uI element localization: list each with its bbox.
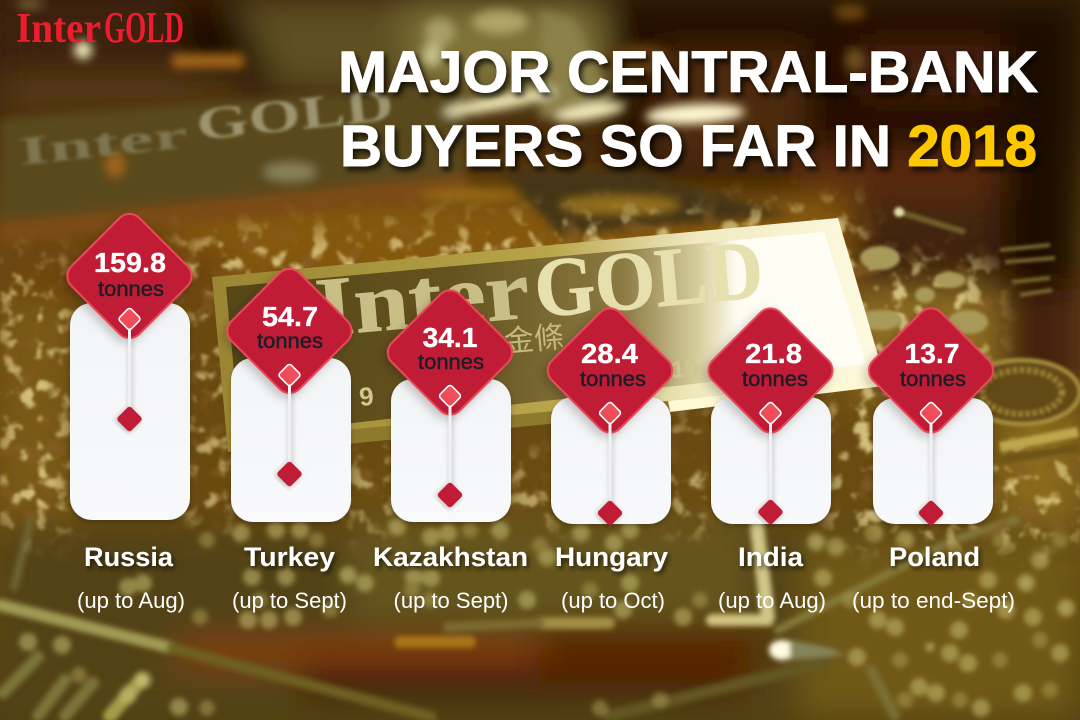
country: Russia — [84, 542, 174, 572]
country: Hungary — [555, 542, 668, 572]
panel: India — [703, 303, 838, 613]
country: Kazakhstan — [373, 542, 528, 572]
value: 13.7 — [904, 338, 960, 369]
title: BUYERS SO FAR IN 2018 — [340, 114, 1037, 179]
unit: tonnes — [900, 368, 966, 391]
logo: Inter — [16, 6, 101, 52]
connector — [597, 401, 623, 526]
connector — [437, 384, 463, 508]
value: 34.1 — [422, 322, 478, 353]
unit: tonnes — [418, 351, 484, 374]
card — [873, 398, 993, 524]
background: blurred gold bars, nuggets and bokeh: GOLD — [194, 79, 396, 150]
background: engraved gold bar: 9 — [358, 381, 375, 412]
panel: Hungary — [542, 303, 678, 613]
value diamond — [863, 303, 999, 438]
connector — [116, 307, 143, 432]
card — [70, 303, 190, 520]
card — [231, 358, 351, 522]
period: (up to Aug) — [718, 588, 826, 613]
period: (up to Sept) — [232, 588, 347, 613]
card — [711, 397, 831, 524]
country: Turkey — [244, 542, 335, 572]
unit: tonnes — [98, 278, 164, 301]
panel: Russia — [62, 208, 197, 613]
value diamond — [703, 303, 838, 438]
card — [551, 397, 671, 524]
value diamond — [382, 285, 518, 420]
background: engraved gold bar: Inter — [312, 244, 533, 355]
period: (up to end-Sept) — [852, 588, 1015, 613]
connector — [757, 401, 784, 525]
title: MAJOR CENTRAL-BANK — [338, 40, 1038, 105]
panel: Turkey — [222, 263, 357, 613]
background: engraved gold bar: 金條 — [503, 321, 565, 359]
background: engraved gold bar — [212, 218, 884, 455]
panel: Poland — [852, 303, 1015, 613]
title — [338, 40, 1038, 179]
value: 21.8 — [745, 338, 802, 369]
background: engraved gold bar: GOLD — [531, 223, 767, 336]
value diamond — [222, 263, 357, 399]
period: (up to Aug) — [77, 588, 185, 613]
country: Poland — [889, 542, 980, 572]
unit: tonnes — [580, 368, 646, 391]
country: India — [738, 542, 804, 572]
value: 54.7 — [262, 301, 318, 332]
connector — [918, 401, 944, 526]
value diamond — [62, 208, 197, 344]
unit: tonnes — [257, 330, 323, 353]
logo: GOLD — [104, 3, 184, 52]
value diamond — [542, 303, 678, 438]
period: (up to Sept) — [394, 588, 508, 613]
background: blurred gold bars, nuggets and bokeh: Inter — [16, 111, 190, 174]
period: (up to Oct) — [561, 588, 665, 613]
value: 159.8 — [94, 247, 166, 278]
background: engraved gold bar: 10 — [670, 355, 699, 384]
value: 28.4 — [581, 338, 638, 369]
unit: tonnes — [742, 368, 808, 391]
logo — [16, 3, 184, 52]
card — [391, 379, 511, 522]
connector — [276, 363, 303, 487]
panel: Kazakhstan — [373, 285, 528, 613]
